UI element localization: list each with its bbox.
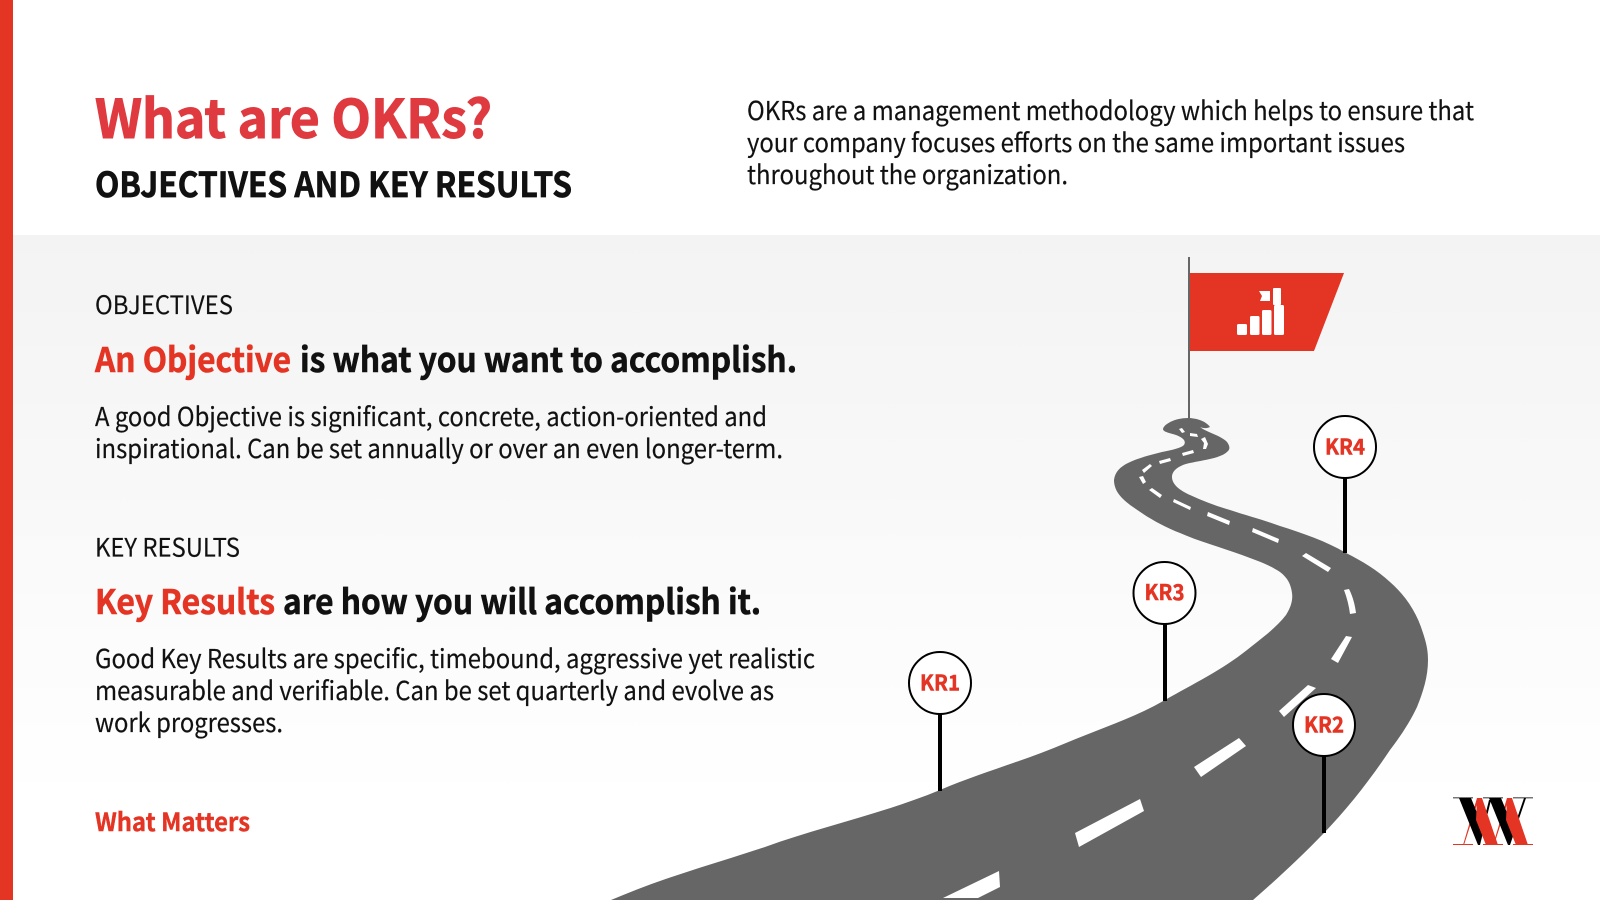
sign KR3: KR3 <box>1144 576 1184 607</box>
red side bar <box>0 0 13 900</box>
sign KR3 <box>1134 562 1196 701</box>
sign KR2 <box>1293 694 1355 833</box>
flag pole <box>1188 257 1190 419</box>
objectives section: OBJECTIVES <box>95 286 233 322</box>
key results section <box>95 528 815 740</box>
sign KR2: KR2 <box>1304 708 1344 740</box>
sign KR1 <box>909 652 971 791</box>
title: What are OKRs? <box>95 78 492 154</box>
road centre dashes <box>943 428 1356 898</box>
key results section: KEY RESULTS <box>95 528 240 564</box>
key results section: work progresses. <box>95 703 283 740</box>
objectives section: A good Objective is significant, concrete, action-oriented and <box>95 397 767 434</box>
icon: rising bars with flag <box>1237 288 1284 335</box>
key results section: Good Key Results are specific, timebound, aggressive yet realistic <box>95 639 815 676</box>
flag <box>1188 257 1344 419</box>
sign KR1: KR1 <box>920 666 960 698</box>
sign KR4 <box>1314 416 1376 553</box>
subtitle: OBJECTIVES AND KEY RESULTS <box>95 157 572 207</box>
flag banner <box>1190 273 1344 351</box>
logo <box>1453 797 1533 845</box>
key results section: are how you will accomplish it. <box>283 575 761 624</box>
objectives section: inspirational. Can be set annually or over an even longer-term. <box>95 429 783 466</box>
intro paragraph: OKRs are a management methodology which helps to ensure that <box>747 91 1474 128</box>
brand label: What Matters <box>95 803 250 839</box>
intro paragraph: throughout the organization. <box>747 155 1068 192</box>
intro paragraph <box>747 91 1474 192</box>
sign KR4: KR4 <box>1325 430 1365 462</box>
intro paragraph: your company focuses efforts on the same important issues <box>747 123 1405 160</box>
objectives section: An Objective <box>94 333 291 382</box>
background panel <box>0 235 1600 900</box>
objectives section <box>94 286 797 466</box>
key results section: measurable and verifiable. Can be set quarterly and evolve as <box>95 671 774 708</box>
key results section: Key Results <box>95 575 275 624</box>
objectives section: is what you want to accomplish. <box>300 333 797 382</box>
road <box>611 418 1428 900</box>
